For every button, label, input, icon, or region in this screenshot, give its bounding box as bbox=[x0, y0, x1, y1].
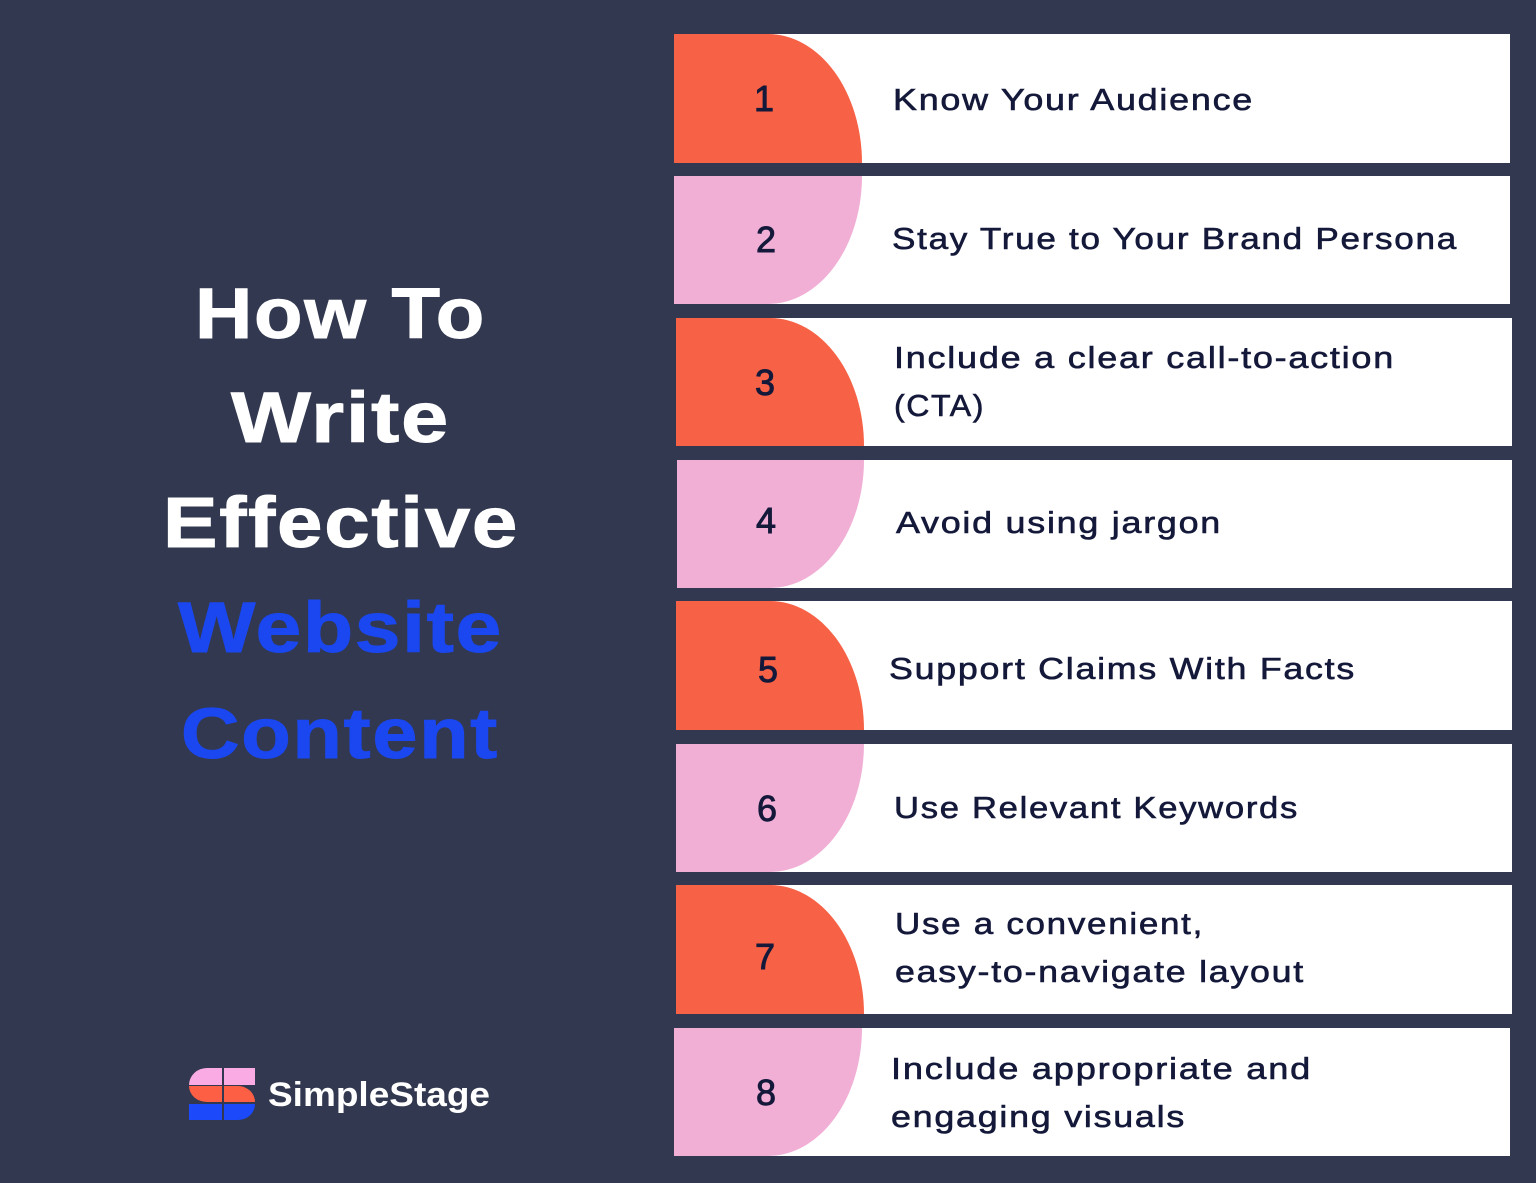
title line: How To: How To bbox=[195, 275, 486, 354]
row 2: 2 bbox=[756, 219, 776, 260]
title line: Website: Website bbox=[178, 589, 503, 668]
row 2: Stay True to Your Brand Persona bbox=[892, 221, 1458, 256]
row 8: Include appropriate and bbox=[891, 1051, 1312, 1086]
logo: SimpleStage bbox=[189, 1068, 490, 1120]
row 7 bbox=[676, 885, 1512, 1014]
row 5: 5 bbox=[758, 649, 778, 690]
row 7: 7 bbox=[755, 936, 775, 977]
row 3 bbox=[676, 318, 1512, 446]
row 8: engaging visuals bbox=[891, 1099, 1186, 1134]
row 2 bbox=[674, 176, 1510, 304]
row 7: Use a convenient, bbox=[895, 906, 1204, 941]
row 6: 6 bbox=[757, 788, 777, 829]
title line: Write: Write bbox=[231, 379, 450, 458]
row 8 bbox=[674, 1028, 1510, 1156]
row 4 bbox=[677, 460, 1512, 588]
title bbox=[163, 275, 519, 774]
row 5: Support Claims With Facts bbox=[889, 651, 1356, 686]
row 6: Use Relevant Keywords bbox=[894, 790, 1299, 825]
row 1: 1 bbox=[754, 78, 774, 119]
row 8: 8 bbox=[756, 1072, 776, 1113]
row 4: Avoid using jargon bbox=[896, 505, 1222, 540]
title line: Content: Content bbox=[181, 695, 499, 774]
row 7: easy-to-navigate layout bbox=[895, 954, 1305, 989]
logo wordmark: SimpleStage bbox=[268, 1076, 490, 1114]
row 3: 3 bbox=[755, 362, 775, 403]
row 3: (CTA) bbox=[894, 388, 985, 423]
logo icon bbox=[189, 1068, 255, 1120]
row 4: 4 bbox=[756, 500, 776, 541]
row 5 bbox=[676, 601, 1512, 730]
row 1: Know Your Audience bbox=[893, 82, 1254, 117]
row 3: Include a clear call-to-action bbox=[894, 340, 1395, 375]
row 1 bbox=[674, 34, 1510, 163]
row 6 bbox=[676, 744, 1512, 872]
title line: Effective: Effective bbox=[163, 484, 519, 563]
